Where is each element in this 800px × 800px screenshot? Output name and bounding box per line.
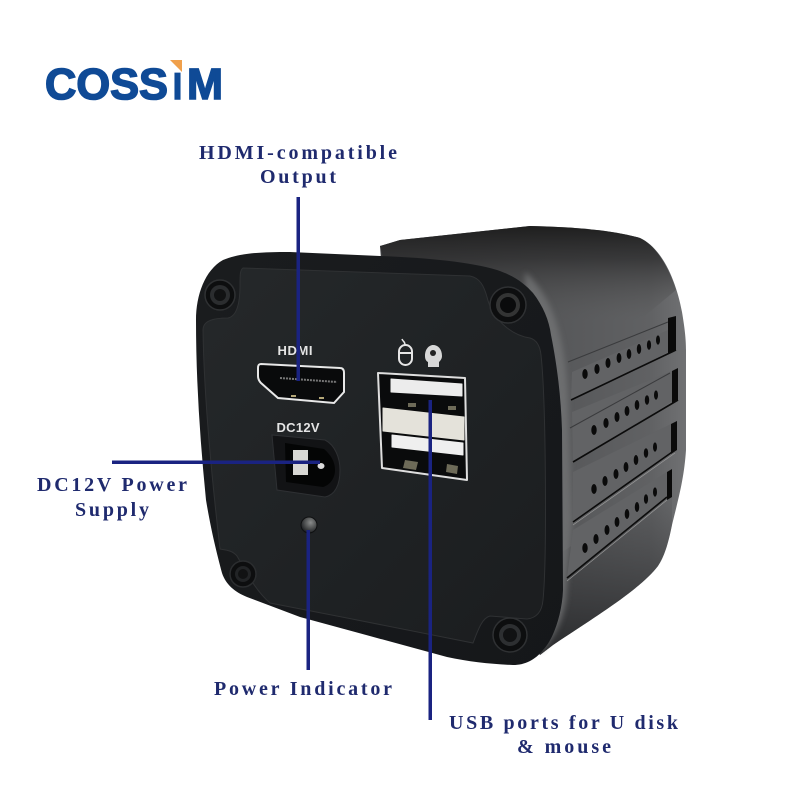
screw: bottom right [493,618,527,652]
DC power port [272,435,340,497]
vent slots [567,316,678,581]
screw: bottom left [230,561,256,587]
top shading [380,226,676,320]
label: USB ports for U disk & mouse: USB ports for U disk [449,712,679,734]
icon: mouse [399,339,412,365]
label: HDMI-compatible Output [199,142,397,188]
side edge band [525,272,572,652]
icon: USB disk [425,345,442,367]
label: HDMI-compatible Output: Output [260,166,336,188]
label: USB ports for U disk & mouse: & mouse [517,736,611,758]
logo: COSSIM: COSS [45,60,168,109]
label: HDMI-compatible Output: HDMI-compatible [199,142,397,164]
HDMI silkscreen label: HDMI [278,343,312,358]
USB port [378,373,467,480]
front face panel [203,268,545,643]
DC12V silkscreen label: DC12V [276,420,320,435]
label: USB ports for U disk & mouse [449,712,679,758]
arrow: USB leader line [428,400,432,720]
label: Power Indicator: Power Indicator [214,678,392,700]
logo: COSSIM: I [173,66,182,107]
logo: COSSIM: M [187,60,223,109]
camera housing side [380,226,686,655]
label: DC12V Power Supply [37,474,187,521]
label: DC12V Power Supply: Supply [75,499,149,521]
front face rim [196,252,563,665]
arrow: HDMI leader line [296,197,300,381]
screw: top left [205,280,235,310]
label: DC12V Power Supply: DC12V Power [37,474,187,496]
vent holes [582,335,660,553]
arrow: DC12V leader line [112,460,320,464]
screw: top right [490,287,526,323]
power LED [301,517,317,533]
arrow: power indicator leader line [306,530,310,670]
lower side shading [540,480,672,655]
HDMI port [258,364,344,403]
camera body [196,226,686,665]
